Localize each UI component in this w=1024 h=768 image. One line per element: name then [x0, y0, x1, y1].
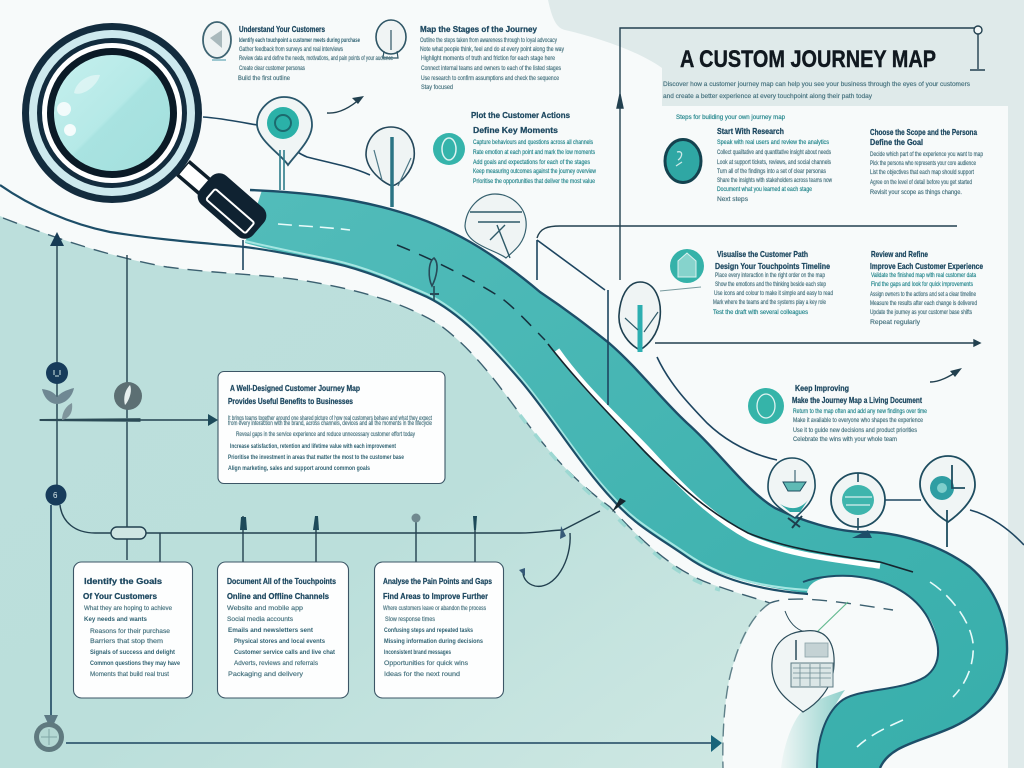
road upper edge	[250, 190, 1007, 768]
body: Adverts, reviews and referrals	[234, 660, 319, 667]
body: Speak with real users and review the analytics	[717, 139, 830, 146]
body: Physical stores and local events	[234, 638, 325, 645]
icon: teal shield	[660, 249, 704, 291]
body: Use icons and colour to make it simple and easy to read	[714, 290, 833, 297]
body: Use it to guide new decisions and product priorities	[793, 427, 918, 434]
heading: Start With Research	[717, 126, 784, 136]
body: Repeat regularly	[870, 319, 921, 326]
heading: A Well-Designed Customer Journey Map	[230, 383, 360, 393]
road dashes dark	[397, 245, 545, 340]
body: Emails and newsletters sent	[228, 627, 314, 634]
body: Revisit your scope as things change.	[870, 189, 962, 196]
road	[0, 185, 1007, 768]
body: Show the emotions and the thinking beside each step	[715, 281, 826, 288]
body: Signals of success and delight	[90, 649, 176, 656]
node: navy drop with leaves	[42, 362, 74, 420]
body: Reveal gaps in the service experience and reduce unnecessary customer effort today	[236, 431, 416, 438]
subtitle: and create a better experience at every touchpoint along their path today	[663, 93, 873, 100]
subheading: Online and Offline Channels	[227, 591, 329, 601]
body: Prioritise the investment in areas that matter the most to the customer base	[228, 454, 404, 461]
magnifier handle neck	[183, 168, 212, 193]
card: overview	[218, 372, 445, 484]
body: Increase satisfaction, retention and lifetime value with each improvement	[230, 443, 397, 450]
body: Website and mobile app	[227, 605, 303, 612]
body	[227, 605, 336, 678]
road lower light edge	[245, 241, 808, 590]
body: Align marketing, sales and support around common goals	[228, 465, 370, 472]
lower-left teal field	[0, 216, 770, 768]
node: globe bottom	[34, 722, 64, 752]
node: gray leaf	[114, 382, 142, 410]
body: Next steps	[717, 196, 749, 203]
subheading: Improve Each Customer Experience	[870, 261, 983, 271]
body: Outline the steps taken from awareness through to loyal advocacy	[420, 37, 558, 44]
body	[383, 605, 487, 678]
body: Document what you learned at each stage	[717, 186, 812, 193]
node: navy circle	[46, 484, 66, 506]
body	[84, 605, 180, 678]
body: Stay focused	[421, 84, 453, 91]
pin: teal map pin	[257, 97, 312, 190]
body: Decide which part of the experience you want to map	[870, 151, 983, 158]
body: Assign owners to the actions and set a clear timeline	[870, 291, 976, 298]
body: Prioritise the opportunities that deliver the most value	[473, 178, 595, 185]
heading: Plot the Customer Actions	[471, 110, 570, 120]
body: Agree on the level of detail before you get started	[870, 179, 972, 186]
icon: dark ring teal	[665, 140, 701, 182]
body: Packaging and delivery	[228, 671, 304, 678]
body: Confusing steps and repeated tasks	[384, 627, 473, 634]
subtitle: Discover how a customer journey map can help you see your business through the eyes of your customers	[663, 81, 971, 88]
body: Measure the results after each change is delivered	[870, 300, 977, 307]
body: What they are hoping to achieve	[84, 605, 172, 612]
panel: right text block one	[717, 126, 832, 203]
icon: teal circle	[433, 133, 465, 165]
body	[793, 408, 927, 443]
road centre black line	[548, 344, 913, 572]
body: Where customers leave or abandon the process	[383, 605, 487, 612]
subtitle	[663, 81, 971, 100]
body: Note what people think, feel and do at every point along the way	[420, 46, 565, 53]
card: step three	[374, 562, 504, 698]
body: Slow response times	[385, 616, 436, 623]
panel: right text block five	[792, 383, 927, 443]
body: Inconsistent brand messages	[384, 649, 451, 656]
heading: Analyse the Pain Points and Gaps	[383, 576, 492, 586]
body: Reasons for their purchase	[90, 628, 170, 635]
small curved arrow right	[930, 368, 962, 382]
title: A CUSTOM JOURNEY MAP	[680, 46, 936, 73]
body: Turn all of the findings into a set of clear personas	[717, 168, 827, 175]
body	[238, 37, 393, 82]
heading: Identify the Goals	[84, 576, 162, 586]
heading: Visualise the Customer Path	[717, 249, 808, 259]
magnifier light ring	[40, 40, 184, 186]
pin: teal gear	[885, 456, 975, 547]
pin: boat	[768, 458, 815, 528]
road white stripe	[557, 350, 880, 566]
magnifier grip	[193, 169, 271, 243]
pin: leaf large	[619, 282, 660, 352]
subheading: Of Your Customers	[83, 591, 157, 601]
small curved arrow top	[327, 96, 364, 113]
icon: teal leaf	[748, 388, 784, 424]
body	[717, 139, 832, 203]
subheading: Find Areas to Improve Further	[383, 591, 489, 601]
heading: Document All of the Touchpoints	[227, 576, 336, 586]
body: Use research to confirm assumptions and check the sequence	[421, 75, 559, 82]
panel: right text block four	[870, 249, 983, 326]
body: List the objectives that each map should support	[870, 169, 974, 176]
body: Key needs and wants	[84, 616, 147, 623]
body: Find the gaps and look for quick improvements	[871, 281, 974, 288]
subheading: Design Your Touchpoints Timeline	[715, 261, 830, 271]
body	[713, 272, 833, 316]
title backdrop band	[548, 0, 1024, 768]
pin: top small	[203, 22, 231, 60]
subheading: Make the Journey Map a Living Document	[792, 395, 922, 405]
panel: top text block one	[238, 24, 393, 82]
body: Celebrate the wins with your whole team	[793, 436, 897, 443]
body: Keep measuring outcomes against the journey overview	[473, 168, 596, 175]
panel: right text block three	[713, 249, 833, 316]
body	[473, 139, 596, 185]
body: Validate the finished map with real customer data	[871, 272, 976, 279]
light strip by the road exit	[781, 690, 845, 768]
lens highlights	[74, 75, 100, 94]
body: Moments that build real trust	[90, 671, 169, 678]
heading: Understand Your Customers	[239, 24, 325, 34]
body: Rate emotion at each point and mark the low moments	[473, 149, 596, 156]
body: Look at support tickets, reviews, and social channels	[717, 159, 832, 166]
left flow connector lines	[40, 232, 722, 752]
body: Collect qualitative and quantitative insight about needs	[717, 149, 832, 156]
subheading: Define Key Moments	[473, 125, 558, 135]
body: Share the insights with stakeholders across teams now	[717, 177, 832, 184]
body: Social media accounts	[227, 616, 294, 623]
heading: Review and Refine	[871, 249, 928, 259]
pin: tree three	[465, 194, 526, 258]
body: Highlight moments of truth and friction for each stage here	[421, 55, 555, 62]
body: Connect internal teams and owners to each of the listed stages	[421, 65, 562, 72]
body: Mark where the teams and the systems play a key role	[713, 299, 826, 306]
road inner bend edge	[803, 576, 938, 768]
body: from every interaction with the brand, across channels, devices and all the moments in the lifecycle	[228, 420, 432, 427]
road dashes white	[278, 224, 973, 747]
strap icon on road	[429, 258, 439, 300]
heading: Map the Stages of the Journey	[420, 24, 537, 34]
body: Gather feedback from surveys and real interviews	[239, 46, 344, 53]
node: navy circle: 6	[53, 491, 58, 500]
right frame connector lines	[537, 26, 985, 346]
body: Make it available to everyone who shapes the experience	[793, 417, 923, 424]
pin: top second	[376, 20, 406, 58]
body: Common questions they may have	[90, 660, 180, 667]
pin: tree two	[366, 127, 414, 207]
panel: right text block two	[870, 127, 983, 196]
body: Identify each touchpoint a customer meets during purchase	[239, 37, 360, 44]
body: Add goals and expectations for each of the stages	[473, 159, 591, 166]
heading: Choose the Scope and the Persona	[870, 127, 977, 137]
panel: centre text block	[471, 110, 596, 185]
body: Opportunities for quick wins	[384, 660, 469, 667]
hill contour lines	[203, 117, 1024, 545]
body: Pick the persona who represents your core audience	[870, 160, 976, 167]
subheading: Define the Goal	[870, 137, 923, 147]
magnifier lens	[50, 52, 174, 174]
magnifier outer ring	[26, 26, 198, 200]
body: Barriers that stop them	[90, 638, 163, 645]
body: Ideas for the next round	[384, 671, 460, 678]
body: Update the journey as your customer base shifts	[870, 309, 973, 316]
body	[870, 151, 983, 196]
magnifying glass	[26, 26, 271, 243]
body: Capture behaviours and questions across all channels	[473, 139, 594, 146]
body	[870, 272, 977, 326]
body: Place every interaction in the right order on the map	[715, 272, 825, 279]
body: Return to the map often and add any new findings over time	[793, 408, 927, 415]
card: step two	[218, 562, 348, 698]
panel: top text block two	[420, 24, 565, 91]
body: Customer service calls and live chat	[234, 649, 336, 656]
body: Build the first outline	[238, 75, 290, 82]
body: Review data and define the needs, motivations, and pain points of your audience	[239, 55, 393, 62]
body: Missing information during decisions	[384, 638, 483, 645]
bottom building bubble	[772, 602, 848, 712]
body	[420, 37, 565, 91]
road lower edge	[0, 185, 808, 594]
card: step one	[74, 562, 192, 698]
body: It brings teams together around one shared picture of how real customers behave and what they expect	[228, 415, 432, 422]
heading: Keep Improving	[795, 383, 849, 393]
body	[228, 415, 432, 472]
pin: teal dome	[831, 473, 885, 538]
subheading: Provides Useful Benefits to Businesses	[228, 396, 353, 406]
section label: Steps for building your own journey map	[676, 114, 785, 121]
body: Create clear customer personas	[239, 65, 306, 72]
body: Test the draft with several colleagues	[713, 309, 809, 316]
dashed path edge	[3, 218, 893, 768]
